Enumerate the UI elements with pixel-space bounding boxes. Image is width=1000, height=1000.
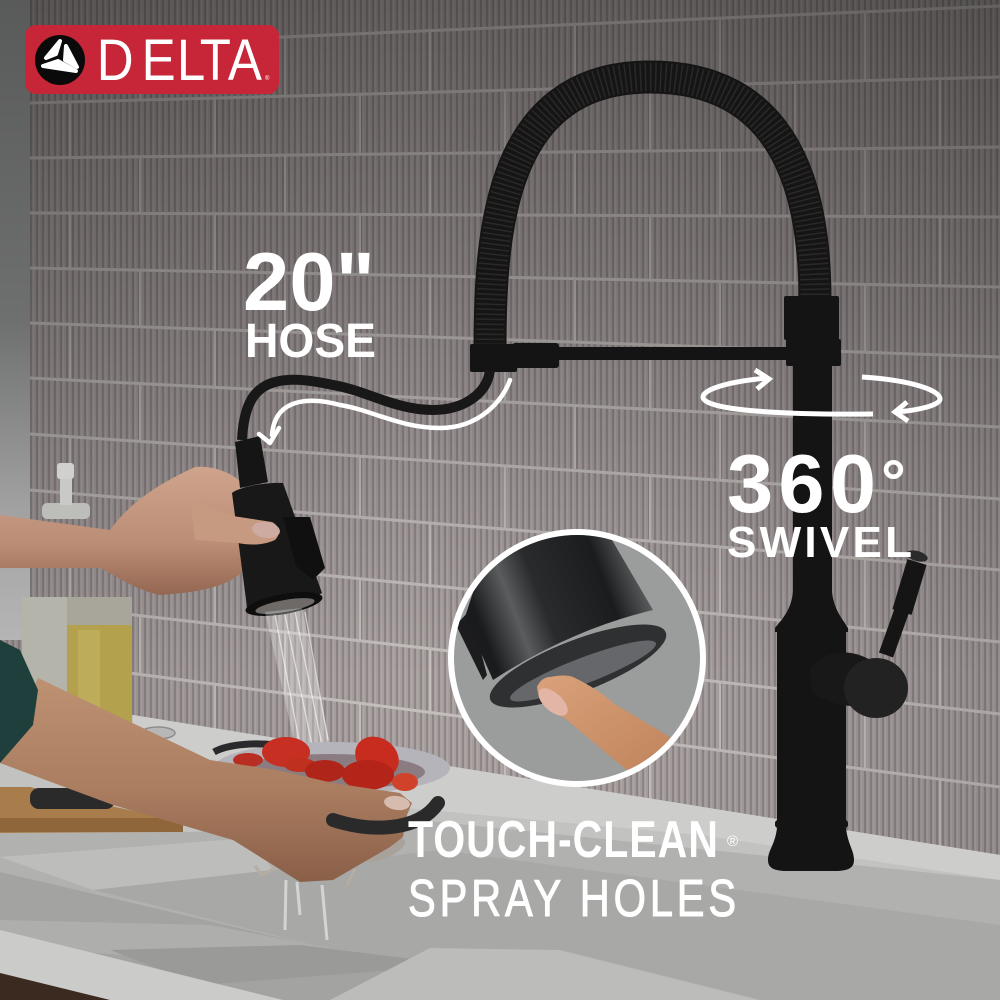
arrow: hose direction	[259, 380, 510, 443]
faucet: horizontal arm and coupling	[470, 343, 790, 372]
lower arm and hand with sweater cuff	[0, 640, 438, 882]
water spray	[265, 608, 330, 940]
pull-down hose	[242, 370, 490, 440]
label: touch-clean spray holes: SPRAY HOLES	[408, 869, 740, 927]
left wall edge	[0, 0, 30, 640]
label: touch-clean spray holes	[408, 810, 740, 927]
label: touch-clean spray holes: ®	[727, 833, 738, 850]
label: 360 swivel: °	[881, 448, 906, 517]
label: 360 swivel	[727, 437, 912, 567]
label: 20 inch hose: 20"	[243, 235, 375, 328]
faucet: column and base	[768, 296, 854, 871]
logo: Delta: DELTA	[97, 28, 262, 93]
label: 360 swivel: SWIVEL	[727, 518, 912, 567]
logo: Delta: ®	[265, 75, 270, 82]
label: 20 inch hose	[243, 235, 376, 368]
sprayer head	[232, 436, 325, 621]
countertop and sink	[0, 700, 1000, 1000]
logo: Delta	[25, 25, 279, 94]
label: 20 inch hose: HOSE	[245, 315, 376, 368]
faucet: arched coil spout	[490, 77, 815, 350]
label: 360 swivel: 360	[727, 437, 876, 530]
label: touch-clean spray holes: TOUCH-CLEAN	[408, 810, 719, 868]
thumb over sprayer	[190, 500, 281, 545]
faucet: lever handle	[810, 548, 929, 718]
arrow: 360 swivel rotation	[703, 370, 940, 421]
colander with strawberries	[214, 728, 450, 885]
upper hand behind sprayer	[0, 467, 300, 595]
soap dispenser and bottles	[22, 463, 175, 739]
cutting board and knife	[0, 787, 183, 833]
callout: touch-clean spray face close-up	[448, 520, 706, 787]
